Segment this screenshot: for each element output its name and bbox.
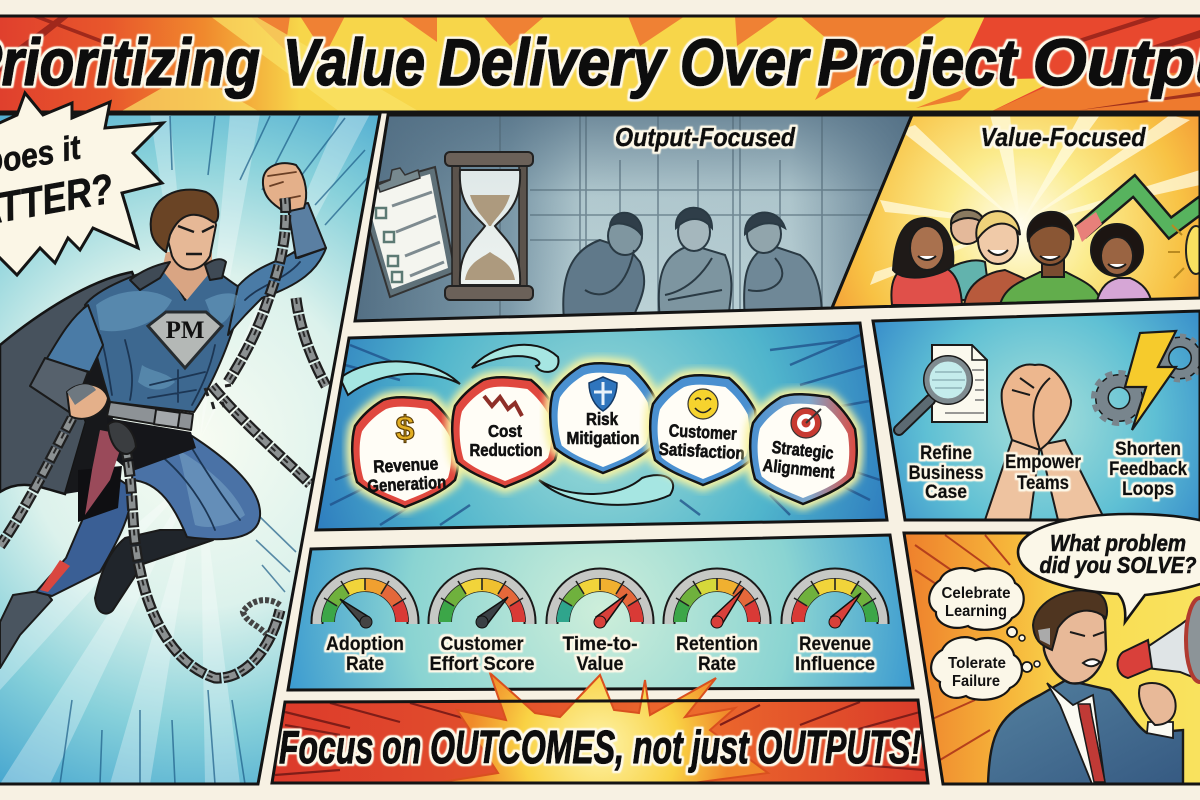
banner text: Focus on OUTCOMES, not just OUTPUTS! <box>279 721 921 773</box>
medallion: strategic alignment <box>750 394 857 504</box>
gauge labels: Rate <box>698 654 736 675</box>
labels: practices: Loops <box>1122 479 1174 500</box>
gauge: revenue influence <box>787 574 883 628</box>
chest emblem <box>148 312 222 368</box>
gauge labels: Adoption <box>326 634 404 655</box>
title text: Project <box>818 25 1019 99</box>
belt <box>107 402 193 430</box>
back leg boot <box>0 590 52 668</box>
medallion: revenue generation: Generation <box>367 472 447 496</box>
gauge labels: Retention <box>676 634 758 655</box>
icon: clipboard <box>370 166 452 298</box>
icon: rising green arrow <box>1076 186 1200 242</box>
neck and collar <box>162 252 212 300</box>
thought cloud: celebrate learning <box>929 568 1025 641</box>
speech bubble: What problem <box>1050 530 1186 556</box>
icon: document with magnifier <box>899 345 987 430</box>
panel: value dimensions <box>316 323 887 530</box>
gauge labels: Time-to- <box>562 634 638 655</box>
gauge labels: Rate <box>346 654 384 675</box>
labels: practices <box>908 439 1187 503</box>
panel: title banner <box>0 16 1200 112</box>
head <box>168 216 217 270</box>
explosion burst <box>436 673 768 783</box>
people: happy team <box>891 210 1152 305</box>
icon: light bulb <box>1168 225 1200 278</box>
medallion: risk mitigation: Risk <box>586 409 618 429</box>
panel: enabling practices <box>873 311 1200 520</box>
labels: practices: Business <box>908 463 984 484</box>
labels: practices: Feedback <box>1109 459 1187 480</box>
thought cloud: celebrate learning: Celebrate <box>942 585 1011 602</box>
medallion: risk mitigation <box>550 363 657 473</box>
panel: output-focused <box>355 115 912 321</box>
labels: practices: Refine <box>920 443 972 464</box>
swooshes <box>340 361 460 395</box>
heading: value-focused: Value-Focused <box>980 122 1147 152</box>
lowered arm <box>46 305 103 372</box>
thought cloud: tolerate failure: Failure <box>952 673 1000 690</box>
raised arm <box>228 248 326 335</box>
medallion: revenue generation <box>352 397 459 507</box>
gauge labels: Effort Score <box>430 654 534 675</box>
gauge labels: Customer <box>440 634 524 655</box>
panel: manager with megaphone <box>904 514 1200 784</box>
medallion: customer satisfaction: Satisfaction <box>658 439 745 463</box>
medallion: customer satisfaction <box>650 375 757 485</box>
medallion: strategic alignment: Alignment <box>762 455 836 482</box>
panel: bottom banner <box>272 673 928 783</box>
title text: Over <box>680 25 811 99</box>
medallion: cost reduction <box>452 377 559 487</box>
panel: value-focused <box>832 115 1200 308</box>
megaphone <box>1125 610 1200 680</box>
icon: hourglass <box>445 152 533 300</box>
title text <box>0 25 1200 99</box>
panel: hero breaking chains <box>0 93 380 784</box>
medallion: revenue generation: $ <box>396 410 415 448</box>
panel: hero breaking chains: PM <box>166 317 204 344</box>
speed lines <box>330 335 880 525</box>
gauge labels: Influence <box>795 654 875 675</box>
labels: practices: Teams <box>1017 473 1069 494</box>
speech burst <box>0 93 163 275</box>
man: head <box>1042 603 1106 683</box>
panel: outcome gauges <box>288 535 913 690</box>
muscle shading <box>96 262 300 405</box>
medallion: risk mitigation: Mitigation <box>566 428 640 448</box>
speech bubble <box>1018 514 1200 622</box>
near boot <box>95 530 213 614</box>
chains <box>0 198 326 678</box>
rays <box>870 115 1200 285</box>
medallion: cost reduction: Reduction <box>470 440 542 460</box>
medallion: customer satisfaction: Customer <box>668 420 737 444</box>
labels: practices: Case <box>925 482 967 503</box>
gauge labels <box>326 634 875 675</box>
thought cloud: tolerate failure <box>931 637 1040 700</box>
fist <box>263 163 306 212</box>
near thigh <box>132 424 260 539</box>
title text: Value <box>283 25 425 99</box>
torso <box>85 265 246 412</box>
title text: Delivery <box>439 25 668 99</box>
labels: practices: Empower <box>1005 452 1082 473</box>
medallion: strategic alignment: Strategic <box>771 437 835 463</box>
shirt cuff <box>1147 722 1173 738</box>
gauge: customer effort score <box>434 574 530 628</box>
gauge labels: Revenue <box>799 634 871 655</box>
hand on handle <box>1139 683 1176 725</box>
medallion: cost reduction: Cost <box>488 421 522 441</box>
man: suit <box>988 680 1183 784</box>
medallion: revenue generation: Revenue <box>373 453 439 477</box>
icon: gears and lightning bolt <box>1094 331 1200 430</box>
rays <box>0 114 370 784</box>
gauge labels: Value <box>576 654 624 675</box>
gauge: adoption rate <box>317 574 413 628</box>
wall grid <box>500 115 900 320</box>
icon: clasped raised fists <box>985 364 1105 520</box>
cape <box>0 272 138 494</box>
speech burst text <box>0 128 117 240</box>
heading: output-focused: Output-Focused <box>615 122 796 152</box>
gauge: time-to-value <box>552 574 648 628</box>
labels: practices: Shorten <box>1115 439 1181 460</box>
thought cloud: celebrate learning: Learning <box>945 603 1007 620</box>
man: shirt and tie <box>1047 683 1105 784</box>
far leg <box>36 480 132 596</box>
gauge: retention rate <box>669 574 765 628</box>
people: three slumped workers <box>563 208 822 320</box>
thought cloud: tolerate failure: Tolerate <box>948 655 1006 672</box>
